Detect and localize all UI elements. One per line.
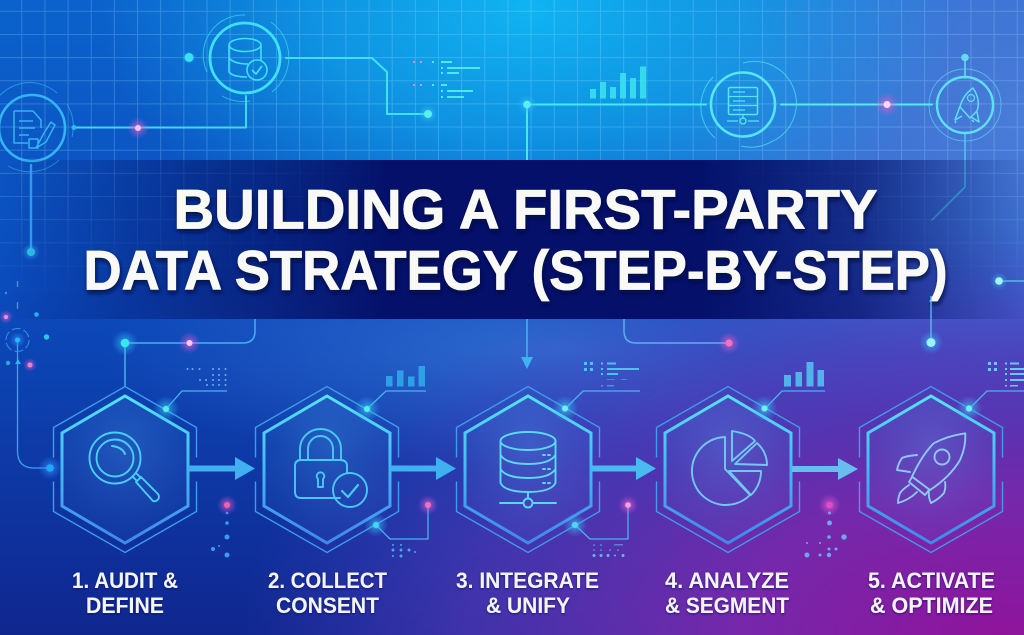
bar chart: top centre xyxy=(590,66,646,98)
node: rocket xyxy=(929,69,1001,141)
label 5 xyxy=(868,568,995,618)
connector: rocket node top xyxy=(964,58,966,78)
dot pattern: below step 4 xyxy=(804,512,847,558)
label 3: 3. INTEGRATE xyxy=(456,568,599,593)
arrow 3 to 4 xyxy=(592,457,656,480)
label 5: & OPTIMIZE xyxy=(870,593,993,618)
connector: banner arrow into step 3 xyxy=(521,319,533,369)
connector: banner to step 5 dot xyxy=(930,296,932,342)
hexagon 2 xyxy=(256,386,398,552)
icon: magnifying glass xyxy=(90,432,159,501)
label 4: 4. ANALYZE xyxy=(665,568,789,593)
top glow dots xyxy=(22,50,969,261)
arrow 2 to 3 xyxy=(390,457,456,480)
label 5: 5. ACTIVATE xyxy=(868,568,995,593)
bar chart 2 xyxy=(386,366,425,386)
label 1: DEFINE xyxy=(86,593,164,618)
step 3: integrate and unify xyxy=(456,362,656,618)
step 1: audit and define xyxy=(54,386,255,618)
icon: database xyxy=(500,432,556,508)
icon: padlock with check xyxy=(295,429,367,507)
icon: rocket xyxy=(897,433,965,503)
connector: right edge dot xyxy=(999,280,1024,282)
label 4 xyxy=(665,568,790,618)
hexagon 1 xyxy=(54,386,196,552)
hexagon 3 xyxy=(456,386,600,552)
dot pattern: below step 1 xyxy=(211,512,230,558)
connector: banner to pink dot xyxy=(624,319,729,343)
step 5: activate and optimize xyxy=(860,362,1024,618)
step 2: collect consent xyxy=(256,366,456,618)
lower glow dots xyxy=(38,272,1008,537)
icon: pie chart xyxy=(692,431,767,505)
hexagon 4 xyxy=(656,386,800,552)
label 4: & SEGMENT xyxy=(665,593,790,618)
label 3: & UNIFY xyxy=(486,593,570,618)
code snippet 5 xyxy=(988,362,1024,386)
node: database with check xyxy=(203,15,289,102)
step 4: analyze and segment xyxy=(656,362,858,618)
label 2: CONSENT xyxy=(276,593,380,618)
hexagon 5 xyxy=(860,386,1002,552)
bar chart 4 xyxy=(784,362,824,386)
connector: audit node to database node xyxy=(74,96,246,128)
node: document with pen xyxy=(0,83,73,172)
node: server xyxy=(701,61,796,147)
dot pattern: above step 1 xyxy=(186,368,226,386)
connector: server node left xyxy=(527,104,706,160)
code snippet: top xyxy=(413,61,480,98)
arrow 1 to 2 xyxy=(188,457,255,480)
top network diagram xyxy=(31,58,965,252)
label 3 xyxy=(456,568,599,618)
title xyxy=(84,178,948,302)
title: DATA STRATEGY (STEP-BY-STEP) xyxy=(84,238,948,302)
code snippet 3 xyxy=(584,362,639,386)
arrow 4 to 5 xyxy=(792,458,858,480)
background grid xyxy=(0,0,1024,268)
connector: left cluster to step 1 xyxy=(18,340,50,468)
lower connectors xyxy=(18,281,1024,539)
title: BUILDING A FIRST-PARTY xyxy=(174,178,878,240)
connector: database node to code block xyxy=(286,58,428,114)
title banner xyxy=(0,160,1024,319)
dot pattern: below step 2 xyxy=(392,544,416,558)
connector: server node to rocket node xyxy=(781,104,932,106)
label 1: 1. AUDIT & xyxy=(72,568,178,593)
left data cluster xyxy=(0,281,49,372)
connector: document node down xyxy=(30,165,32,252)
label 2 xyxy=(268,568,388,618)
connectors: hexagon callouts xyxy=(166,391,1024,539)
dot pattern: below step 3 xyxy=(592,544,624,557)
connector: banner to step 1 xyxy=(125,319,255,386)
label 2: 2. COLLECT xyxy=(268,568,388,593)
label 1 xyxy=(72,568,178,618)
connector: rocket node down xyxy=(932,133,965,220)
